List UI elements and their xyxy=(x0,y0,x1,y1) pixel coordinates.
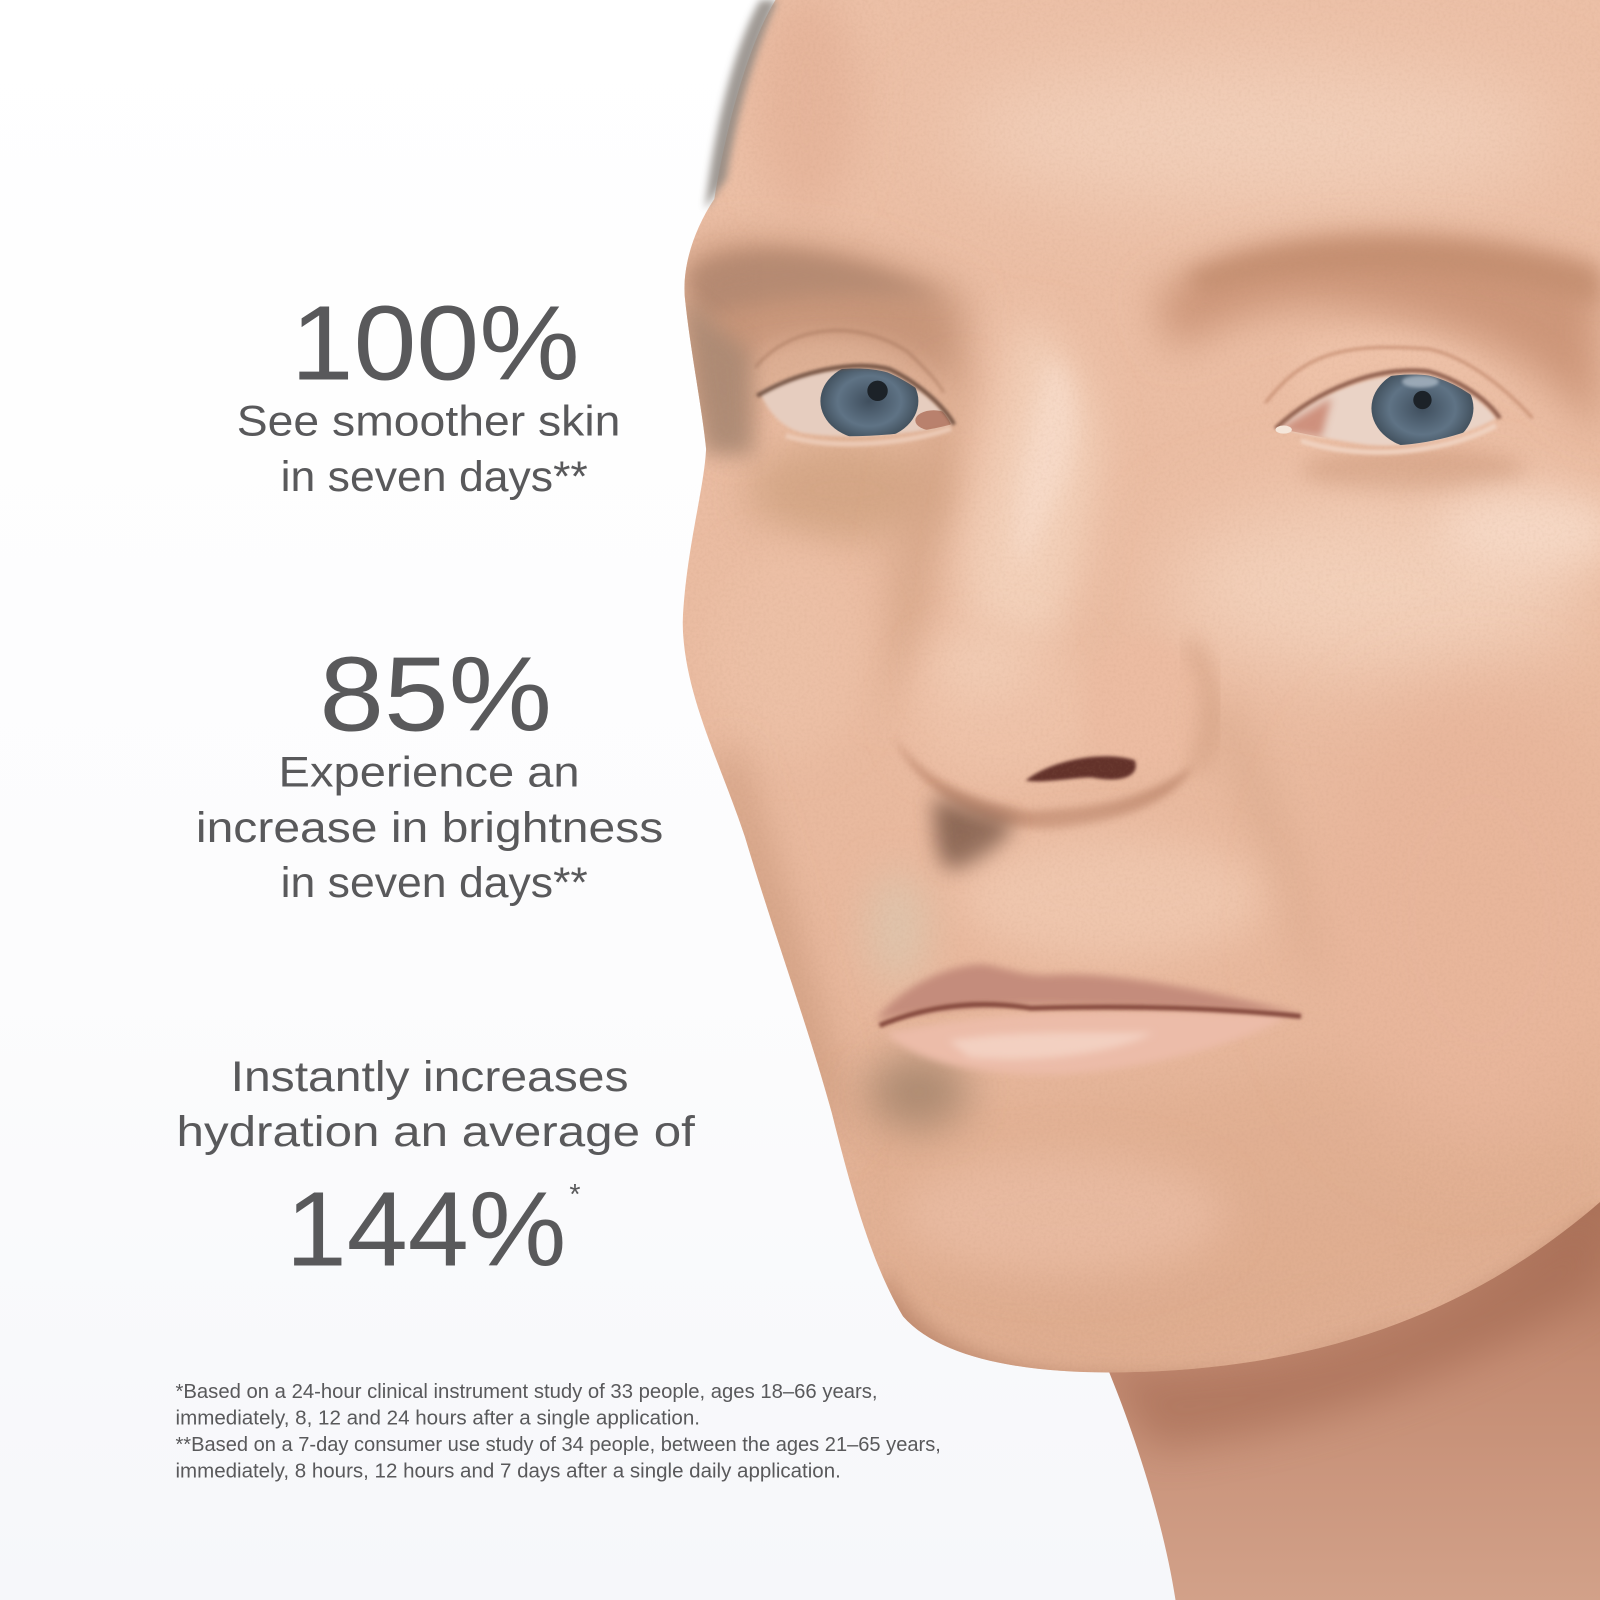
right eye xyxy=(1276,367,1500,452)
under-eye left xyxy=(745,439,949,541)
lower lip xyxy=(886,1011,1288,1074)
asterisk: * xyxy=(569,1179,581,1211)
left eye xyxy=(757,362,954,444)
brow shadow left xyxy=(684,242,964,449)
footnotes xyxy=(176,1381,941,1483)
footnotes: immediately, 8, 12 and 24 hours after a single application. xyxy=(176,1407,700,1429)
brow shadow right xyxy=(1153,237,1600,439)
caption: see smoother skin: in seven days** xyxy=(281,453,588,501)
neck xyxy=(1102,1173,1600,1600)
nose underside xyxy=(898,745,1192,832)
footnotes: *Based on a 24-hour clinical instrument study of 33 people, ages 18–66 years, xyxy=(176,1381,878,1403)
lower right cheek xyxy=(1316,694,1600,1143)
right cheek highlight xyxy=(1163,500,1592,673)
caption: increase in brightness: Experience an xyxy=(279,749,580,797)
nose wing crease xyxy=(1189,643,1211,770)
philtrum and upper-lip area xyxy=(959,837,1265,959)
photo: woman's face in close-up xyxy=(653,0,1600,1600)
upper lid crease left xyxy=(755,330,944,393)
mouth line xyxy=(880,1004,1301,1026)
stat: 85% brightness xyxy=(196,636,663,907)
brow left xyxy=(686,251,944,318)
upper lip xyxy=(876,964,1304,1020)
chin highlight xyxy=(898,1153,1224,1276)
nose bridge side shadow xyxy=(882,404,968,670)
number: 100%: 100% xyxy=(291,285,580,403)
nose wing xyxy=(1084,638,1202,770)
brow right xyxy=(1184,237,1600,306)
upper lid crease right xyxy=(1265,347,1533,418)
caption: see smoother skin: See smoother skin xyxy=(237,398,620,446)
shadow below nose xyxy=(934,796,1015,870)
left cheek xyxy=(704,551,867,755)
nostril xyxy=(1026,756,1136,781)
nose highlight xyxy=(963,316,1099,663)
nose tip xyxy=(934,686,1072,763)
mouth corner shadow xyxy=(867,1053,969,1131)
forehead highlight xyxy=(949,61,1561,204)
jaw edge shadow xyxy=(878,1209,1600,1408)
caption: see smoother skin xyxy=(237,398,620,501)
caption: increase in brightness xyxy=(196,749,663,907)
skin texture xyxy=(653,0,1600,1388)
left pupil xyxy=(867,381,888,401)
under-eye right xyxy=(1301,449,1526,494)
upper lid left xyxy=(780,370,802,378)
footnotes: **Based on a 7-day consumer use study of 34 people, between the ages 21–65 years, xyxy=(176,1434,941,1456)
upper lid right xyxy=(1296,336,1520,406)
hairline at temple xyxy=(705,0,778,209)
caption: instantly increases hydration: hydration an average of xyxy=(177,1108,695,1156)
caption: instantly increases hydration: Instantly increases xyxy=(231,1053,629,1101)
right iris xyxy=(1371,367,1473,449)
number: 85%: 85% xyxy=(319,636,552,754)
stat: 100% smoother skin xyxy=(237,285,620,501)
caption: increase in brightness: in seven days** xyxy=(281,859,588,907)
lower-face shade xyxy=(847,1020,1600,1378)
stat: 144% hydration xyxy=(177,1053,695,1288)
right pupil xyxy=(1413,391,1432,409)
caption: instantly increases hydration xyxy=(177,1053,695,1156)
nasolabial crease right xyxy=(1228,737,1279,843)
footnotes: immediately, 8 hours, 12 hours and 7 days after a single daily application. xyxy=(176,1461,841,1483)
number: 144%: 144% xyxy=(286,1170,566,1288)
tear-duct glint xyxy=(1276,426,1292,434)
outer face shadow at eye xyxy=(682,296,753,454)
left eye corner xyxy=(915,410,952,431)
far left face edge xyxy=(714,754,846,1124)
right inner corner xyxy=(1276,398,1332,437)
left iris xyxy=(820,362,918,440)
caption: increase in brightness: increase in brightness xyxy=(196,804,663,852)
head and skin shading xyxy=(653,0,1600,1408)
